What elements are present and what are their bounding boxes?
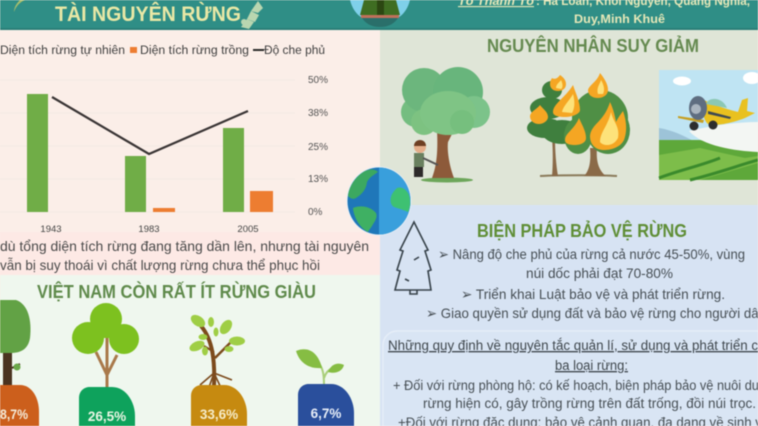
regulations text bbox=[393, 378, 758, 426]
item: 8.7% mature tree: 8,7% bbox=[0, 407, 28, 422]
year labels: 1983 bbox=[138, 224, 160, 235]
item: 6.7% seedling: 6,7% bbox=[311, 406, 341, 421]
item: 26.5% round tree: 26,5% bbox=[88, 409, 126, 424]
panel: chart background bbox=[0, 30, 380, 275]
panel: causes background bbox=[380, 30, 758, 205]
item: 6.7% seedling bbox=[296, 349, 354, 426]
item: 33.6% young tree with roots bbox=[188, 312, 247, 426]
right axis labels: 25% bbox=[308, 142, 328, 153]
protection measures list: ➢ Triển khai Luật bảo vệ và phát triển rừng. bbox=[461, 286, 725, 302]
icon: leaf at top left bbox=[14, 0, 25, 12]
item: 8.7% mature tree bbox=[0, 300, 39, 426]
year labels bbox=[40, 224, 259, 235]
protection measures list: núi dốc phải đạt 70-80% bbox=[526, 265, 673, 281]
regulations box bbox=[383, 331, 758, 426]
right axis labels: 13% bbox=[308, 174, 328, 185]
right axis labels: 0% bbox=[308, 207, 323, 218]
protection measures list: ➢ Nâng độ che phủ của rừng cả nước 45-50%, vùng bbox=[438, 246, 745, 262]
heading: protection measures: BIỆN PHÁP BẢO VỆ RỪNG bbox=[477, 220, 687, 241]
regulations text: rừng hiện có, gây trồng rừng trên đất trống, đồi núi trọc. bbox=[423, 396, 756, 411]
icon: pine tree outline bbox=[395, 222, 431, 294]
title: TÀI NGUYÊN RỪNG bbox=[55, 2, 241, 26]
item: 26.5% round tree bbox=[72, 303, 139, 426]
icon: central globe bbox=[346, 166, 412, 236]
team names: Duy,Minh Khuê bbox=[574, 14, 665, 26]
year labels: 2005 bbox=[237, 224, 259, 235]
header band bbox=[0, 0, 758, 30]
right axis labels bbox=[308, 75, 328, 218]
line: forest cover bbox=[52, 97, 248, 154]
panel: rich forest background bbox=[0, 275, 380, 426]
icon: globe emblem with tree bbox=[350, 0, 410, 27]
heading: causes: NGUYÊN NHÂN SUY GIẢM bbox=[487, 35, 699, 56]
bars: planted forest area bbox=[153, 191, 273, 212]
image: crop duster over field bbox=[659, 70, 758, 180]
heading: rich forest: VIỆT NAM CÒN RẤT ÍT RỪNG GIÀU bbox=[37, 281, 316, 302]
right axis labels: 50% bbox=[308, 75, 328, 86]
chart legend: Diện tích rừng tự nhiên bbox=[0, 45, 125, 57]
chart legend: Độ che phủ bbox=[264, 45, 325, 57]
chart caption: dù tổng diện tích rừng đang tăng dần lên, nhưng tài nguyên bbox=[0, 238, 369, 254]
year labels: 1943 bbox=[40, 224, 62, 235]
panel: caption background bbox=[0, 232, 380, 275]
icon: person cutting a tree bbox=[401, 67, 490, 182]
chart legend: Diện tích rừng trồng bbox=[140, 45, 249, 57]
team names bbox=[458, 0, 750, 26]
icon: leaf sprig beside title bbox=[241, 1, 263, 29]
item: 33.6% young tree with roots: 33,6% bbox=[200, 407, 238, 422]
right axis labels: 38% bbox=[308, 108, 328, 119]
chart caption: vẫn bị suy thoái vì chất lượng rừng chưa thể phục hồi bbox=[0, 257, 320, 273]
chart caption bbox=[0, 238, 369, 273]
icon: burning trees bbox=[527, 73, 630, 176]
chart legend bbox=[0, 45, 325, 57]
bars: natural forest area bbox=[27, 94, 244, 212]
regulations heading bbox=[388, 338, 758, 373]
protection measures list bbox=[426, 246, 758, 321]
regulations heading: ba loại rừng: bbox=[555, 358, 628, 373]
bar and line chart bbox=[0, 75, 328, 235]
panel: protection measures background bbox=[380, 205, 758, 426]
